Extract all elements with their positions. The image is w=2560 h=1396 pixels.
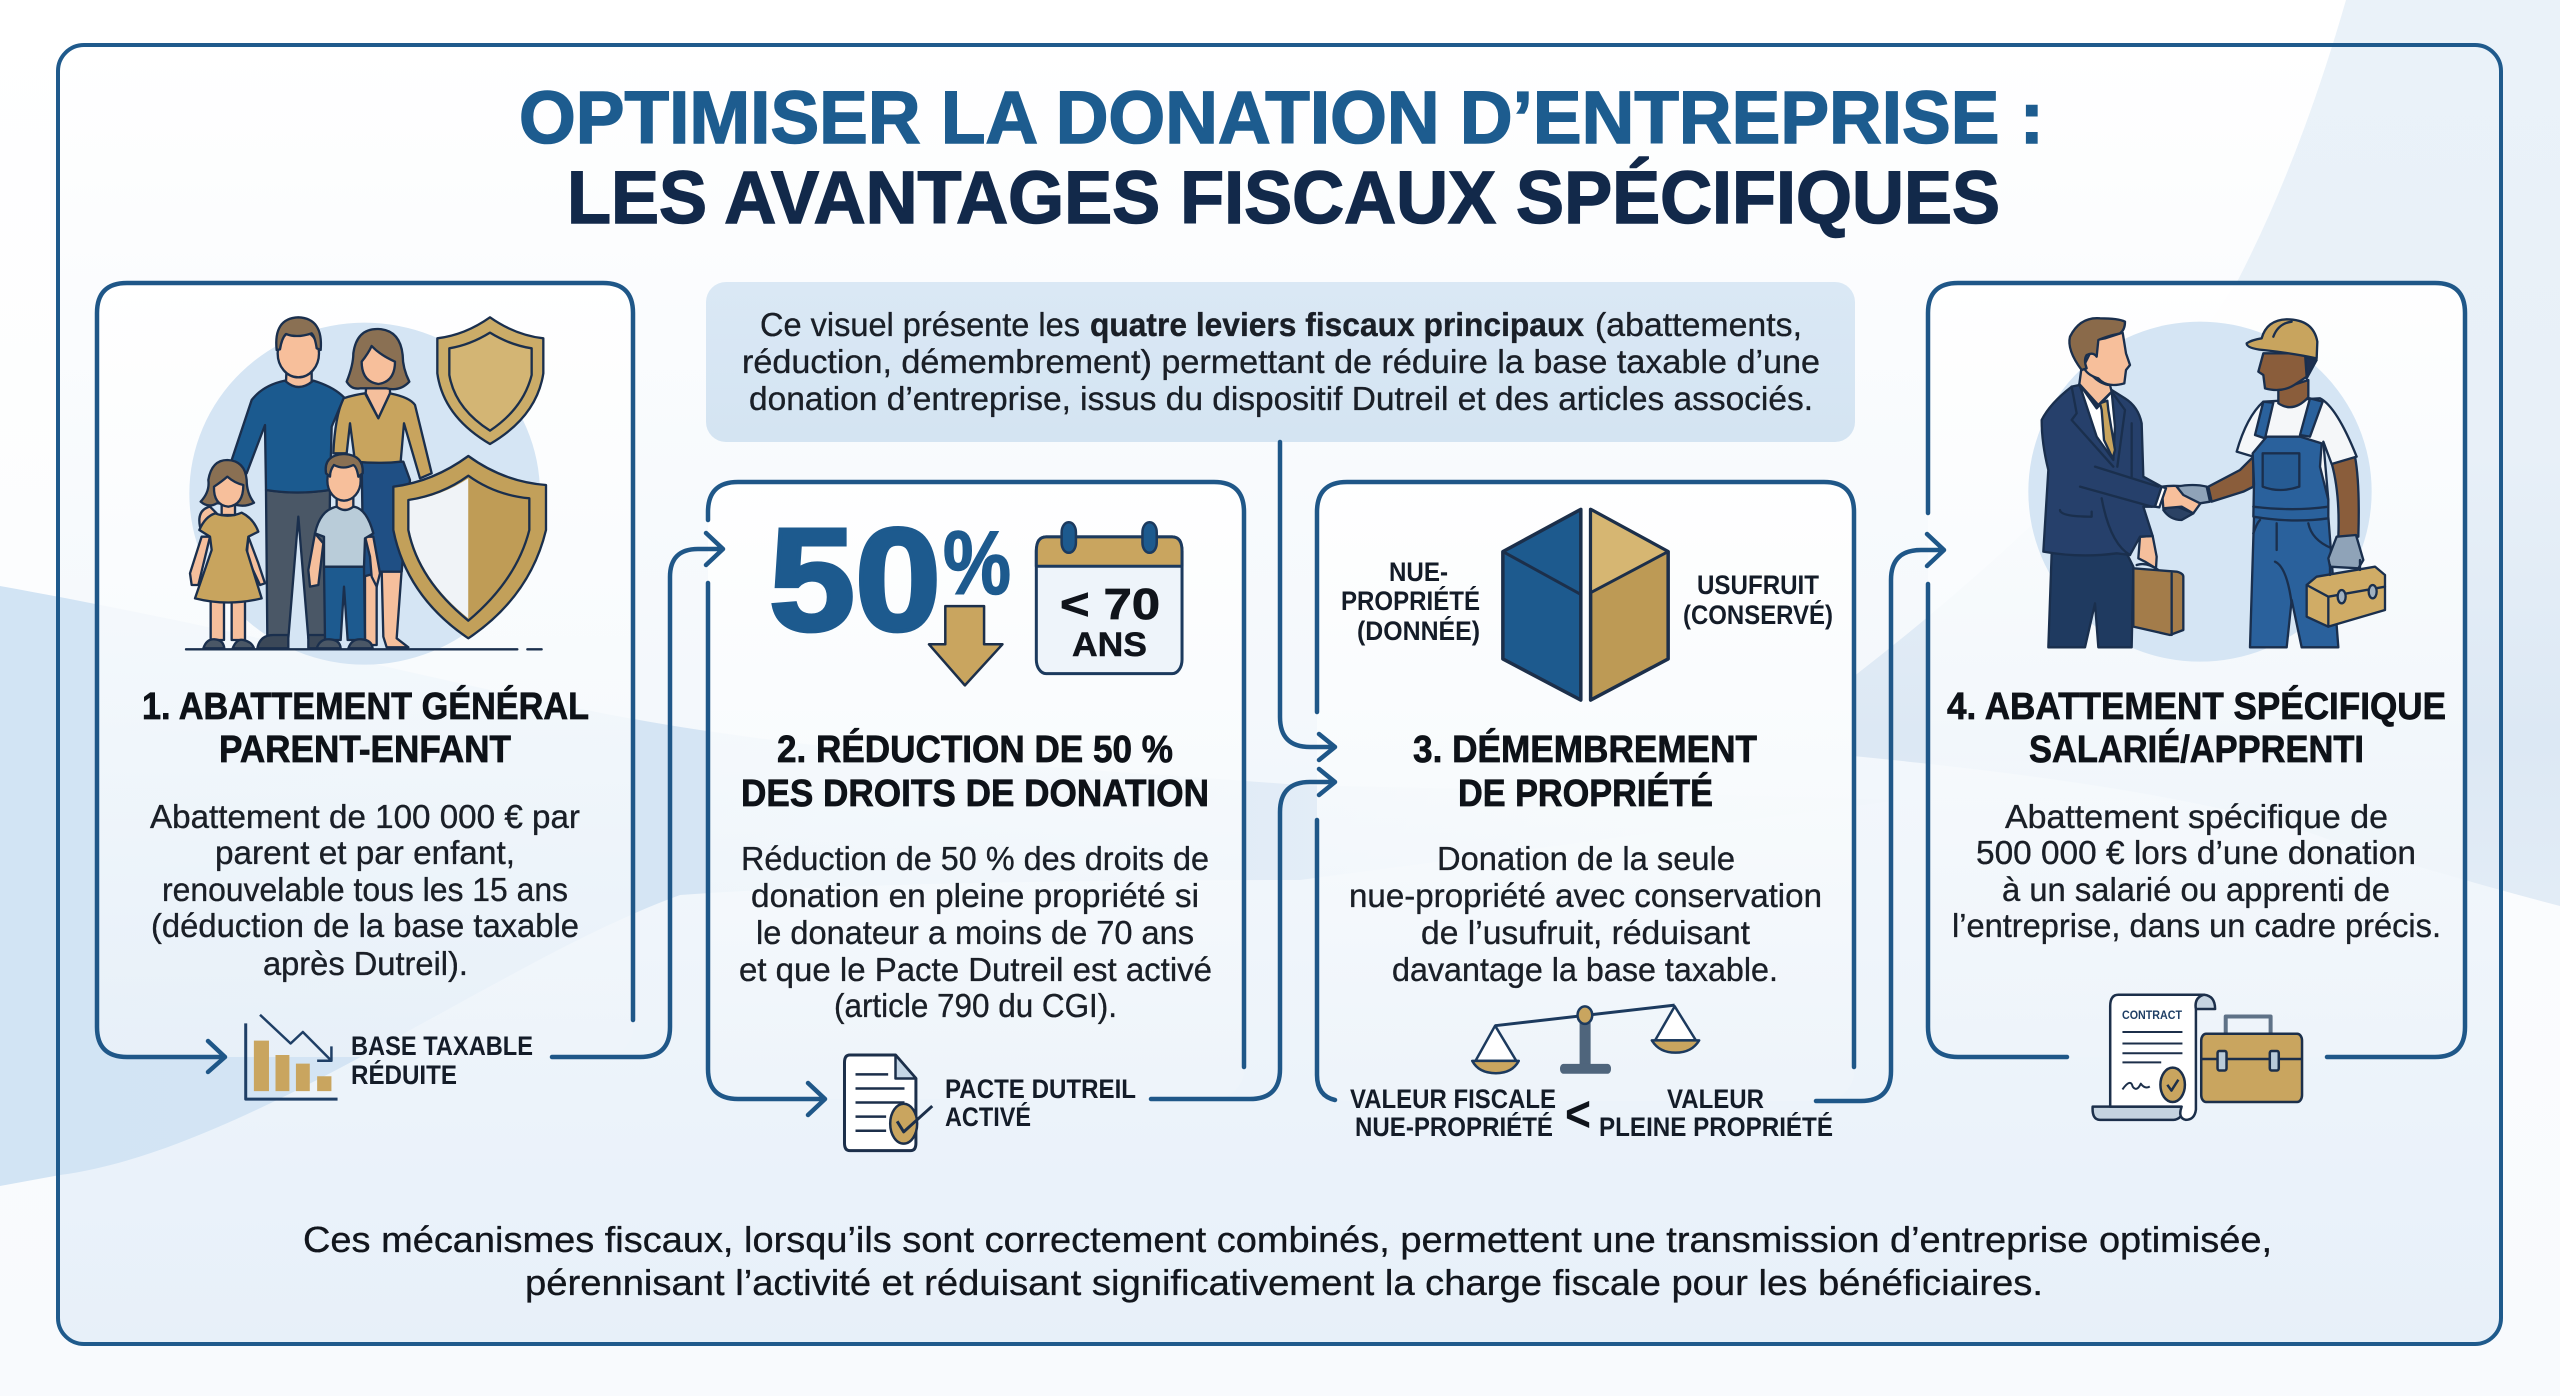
text block 3: nue-propriété avec conservation bbox=[1349, 877, 1822, 914]
heading 1: 1. ABATTEMENT GÉNÉRAL bbox=[142, 684, 589, 728]
heading 4: 4. ABATTEMENT SPÉCIFIQUE bbox=[1947, 684, 2446, 728]
text block 1: parent et par enfant, bbox=[215, 834, 515, 871]
icon: contract and briefcase: CONTRACT bbox=[2122, 1008, 2183, 1022]
arrow: card 1 to card 2 bbox=[552, 533, 723, 1057]
text block 2: et que le Pacte Dutreil est activé bbox=[739, 951, 1212, 988]
calendar text: < 70 bbox=[1060, 580, 1160, 629]
label: valeur fiscale comparison: PLEINE PROPRIÉTÉ bbox=[1599, 1111, 1833, 1142]
panel: card fills bbox=[97, 283, 2465, 1101]
icon: falling bar chart bbox=[246, 1015, 338, 1099]
text block 3: Donation de la seule bbox=[1437, 840, 1735, 877]
label: valeur fiscale comparison: < bbox=[1565, 1086, 1591, 1142]
icon: scales bbox=[1472, 1005, 1699, 1074]
icon: split cube bbox=[1503, 509, 1668, 700]
label: valeur fiscale comparison: VALEUR FISCALE bbox=[1350, 1084, 1556, 1114]
heading 1 bbox=[142, 684, 589, 771]
label: pacte dutreil: ACTIVÉ bbox=[945, 1101, 1031, 1132]
icon: contract and briefcase bbox=[2093, 995, 2302, 1120]
label: base taxable: BASE TAXABLE bbox=[351, 1031, 533, 1061]
text block 2: le donateur a moins de 70 ans bbox=[756, 914, 1194, 951]
big number 50 percent: % bbox=[943, 514, 1011, 614]
heading 3: 3. DÉMEMBREMENT bbox=[1413, 727, 1757, 771]
calendar text bbox=[1060, 580, 1160, 664]
title: OPTIMISER LA DONATION D’ENTREPRISE : bbox=[519, 76, 2044, 159]
heading 1: PARENT-ENFANT bbox=[219, 729, 511, 771]
text block 3: de l’usufruit, réduisant bbox=[1421, 914, 1750, 951]
label: usufruit bbox=[1683, 570, 1833, 630]
card 2 outline and arrow bbox=[708, 482, 1244, 1115]
label: nue-propriete: PROPRIÉTÉ bbox=[1341, 585, 1480, 616]
label: usufruit: (CONSERVÉ) bbox=[1683, 599, 1833, 630]
panel: intro: Ce visuel présente les bbox=[760, 306, 1080, 343]
text block 2: (article 790 du CGI). bbox=[834, 987, 1117, 1024]
heading 4: SALARIÉ/APPRENTI bbox=[2029, 727, 2364, 771]
text block 1: (déduction de la base taxable bbox=[151, 907, 579, 944]
panel: card 3 bbox=[1341, 509, 1833, 1142]
text block 4: Abattement spécifique de bbox=[2005, 798, 2388, 835]
panel: card 1 bbox=[142, 317, 589, 1099]
arrow: card 2 to card 3 bbox=[1151, 769, 1335, 1099]
panel: intro bbox=[706, 282, 1855, 442]
text block 4: à un salarié ou apprenti de bbox=[2002, 871, 2390, 908]
icon: signed document bbox=[844, 1055, 932, 1151]
text block 2 bbox=[739, 840, 1212, 1024]
text block 4 bbox=[1952, 798, 2441, 944]
text block 2: donation en pleine propriété si bbox=[751, 877, 1199, 914]
icon: handshake between manager and worker bbox=[2028, 318, 2385, 662]
heading 2 bbox=[741, 727, 1209, 815]
label: valeur fiscale comparison bbox=[1350, 1084, 1833, 1142]
label: usufruit: USUFRUIT bbox=[1697, 570, 1819, 600]
panel: card 4 bbox=[1947, 318, 2446, 1120]
heading 3 bbox=[1413, 727, 1757, 815]
icon: down arrow and calendar bbox=[929, 522, 1182, 685]
card 1 outline and arrow bbox=[97, 283, 633, 1072]
footer bbox=[303, 1219, 2272, 1303]
icon: family with shields bbox=[186, 317, 546, 665]
big number 50 percent bbox=[769, 498, 1011, 661]
label: valeur fiscale comparison: NUE-PROPRIÉTÉ bbox=[1355, 1111, 1553, 1142]
text block 1: Abattement de 100 000 € par bbox=[150, 798, 580, 835]
panel: intro: donation d’entreprise, issus du dispositif Dutreil et des articles associés. bbox=[749, 380, 1813, 417]
text block 1 bbox=[150, 798, 580, 982]
text block 1: après Dutreil). bbox=[263, 945, 468, 982]
card 4 outline bbox=[1928, 283, 2465, 1057]
card 3 outline bbox=[1317, 482, 1854, 1100]
label: pacte dutreil bbox=[945, 1074, 1136, 1132]
heading 4 bbox=[1947, 684, 2446, 771]
text block 4: 500 000 € lors d’une donation bbox=[1976, 834, 2416, 871]
heading 2: 2. RÉDUCTION DE 50 % bbox=[777, 727, 1173, 771]
text block 1: renouvelable tous les 15 ans bbox=[162, 871, 568, 908]
big number 50 percent: 50 bbox=[769, 498, 941, 661]
arrow: card 3 to card 4 bbox=[1816, 534, 1944, 1101]
title: LES AVANTAGES FISCAUX SPÉCIFIQUES bbox=[567, 156, 2000, 239]
footer: Ces mécanismes fiscaux, lorsqu’ils sont correctement combinés, permettent une transmission d’entreprise optimisée, bbox=[303, 1219, 2272, 1260]
panel: card 2 bbox=[739, 498, 1212, 1151]
title bbox=[519, 76, 2044, 239]
heading 3: DE PROPRIÉTÉ bbox=[1458, 771, 1713, 815]
panel: intro: réduction, démembrement) permettant de réduire la base taxable d’une bbox=[742, 343, 1820, 380]
panel: intro: quatre leviers fiscaux principaux bbox=[1090, 306, 1585, 343]
label: nue-propriete: NUE- bbox=[1389, 557, 1448, 587]
text block 3: davantage la base taxable. bbox=[1392, 951, 1778, 988]
heading 2: DES DROITS DE DONATION bbox=[741, 773, 1209, 815]
label: base taxable bbox=[351, 1031, 533, 1090]
text block 3 bbox=[1349, 840, 1822, 988]
text block 2: Réduction de 50 % des droits de bbox=[741, 840, 1209, 877]
label: pacte dutreil: PACTE DUTREIL bbox=[945, 1074, 1136, 1104]
footer: pérennisant l’activité et réduisant significativement la charge fiscale pour les bénéficiaires. bbox=[525, 1262, 2043, 1303]
label: valeur fiscale comparison: VALEUR bbox=[1667, 1084, 1764, 1114]
label: base taxable: RÉDUITE bbox=[351, 1059, 457, 1090]
label: nue-propriete: (DONNÉE) bbox=[1357, 615, 1480, 646]
arrow: intro to card 3 bbox=[1280, 442, 1335, 760]
text block 4: l’entreprise, dans un cadre précis. bbox=[1952, 907, 2441, 944]
label: nue-propriete bbox=[1341, 557, 1480, 646]
panel: intro: (abattements, bbox=[1595, 306, 1802, 343]
calendar text: ANS bbox=[1072, 626, 1147, 664]
